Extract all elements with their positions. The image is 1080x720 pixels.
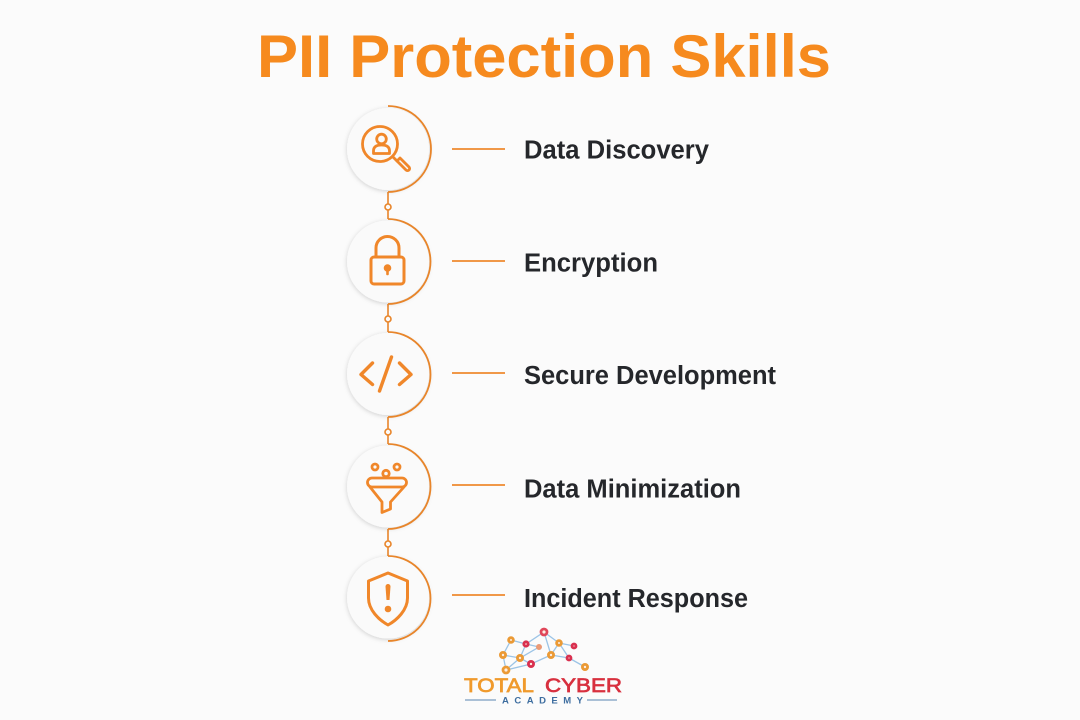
- timeline connectors: [385, 192, 391, 556]
- arc: [388, 106, 431, 192]
- icon: badge circle: [347, 333, 429, 415]
- icon: badge circle: [347, 446, 429, 528]
- icon: shield alert: [368, 573, 408, 625]
- step 1: Data Discovery: [347, 106, 710, 192]
- step 2: Encryption: [347, 219, 658, 304]
- icon: padlock: [371, 236, 404, 284]
- arc: [388, 219, 430, 304]
- step 5: Incident Response: [347, 556, 748, 641]
- icon: person magnifier: [362, 126, 410, 171]
- icon: badge circle: [347, 556, 429, 638]
- connector line: [452, 372, 505, 374]
- icon: code brackets: [361, 357, 411, 391]
- arc: [388, 444, 430, 529]
- label: Data Minimization: [524, 476, 741, 504]
- label: Secure Development: [524, 362, 777, 390]
- label: Encryption: [524, 250, 658, 278]
- connector line: [452, 484, 505, 486]
- connector line: [452, 594, 505, 596]
- connector line: [452, 260, 505, 262]
- connector line: [452, 148, 505, 150]
- label: Data Discovery: [524, 136, 710, 164]
- divider lines: [465, 699, 617, 701]
- logo: Total Cyber Academy: [464, 629, 622, 706]
- wordmark: TOTAL CYBER: [464, 675, 622, 697]
- arc: [388, 556, 430, 641]
- academy text: ACADEMY: [502, 696, 584, 706]
- icon: badge circle: [347, 108, 429, 190]
- icon: badge circle: [347, 220, 429, 302]
- label: Incident Response: [524, 585, 748, 613]
- title: PII Protection Skills: [257, 22, 831, 90]
- icon: funnel: [368, 464, 406, 512]
- step 3: Secure Development: [347, 332, 777, 417]
- arc: [388, 332, 430, 417]
- network mark: [500, 629, 588, 673]
- step 4: Data Minimization: [347, 444, 741, 529]
